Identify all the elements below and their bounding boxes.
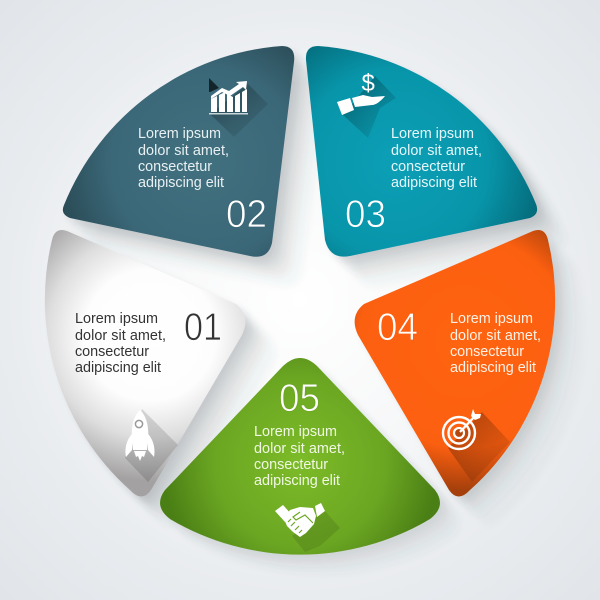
text block 05: consectetur (254, 457, 328, 473)
text block 02: consectetur (138, 159, 212, 175)
icon: hand with dollar: $ (362, 70, 375, 97)
icon: hand with dollar (337, 70, 396, 138)
text block 05: adipiscing elit (254, 473, 340, 489)
text block 03: adipiscing elit (391, 175, 477, 191)
icon: target (443, 409, 510, 482)
number 05: 05 (279, 377, 320, 420)
text block 05: dolor sit amet, (254, 441, 345, 457)
panel: segment 05 (160, 358, 440, 555)
number 04: 04 (377, 306, 418, 349)
icon: rocket (125, 409, 178, 482)
text block 02: Lorem ipsum (138, 126, 221, 142)
text block 01: Lorem ipsum (75, 311, 158, 327)
text block 01: dolor sit amet, (75, 328, 166, 344)
text block 04: Lorem ipsum (450, 311, 533, 327)
text block 02: adipiscing elit (138, 175, 224, 191)
text block 04: consectetur (450, 344, 524, 360)
text block 01: adipiscing elit (75, 360, 161, 376)
number 03: 03 (345, 193, 386, 236)
icon: handshake (275, 503, 340, 552)
text block 02: dolor sit amet, (138, 143, 229, 159)
text block 03: consectetur (391, 159, 465, 175)
panel: segment 03 (306, 46, 537, 257)
icon: bar chart (209, 78, 268, 137)
text block 05: Lorem ipsum (254, 424, 337, 440)
panel: segment 04 (355, 230, 555, 496)
panel: segment 02 (63, 46, 294, 257)
panel: segment 01 (45, 230, 245, 496)
text block 04: dolor sit amet, (450, 328, 541, 344)
text block 03: dolor sit amet, (391, 143, 482, 159)
text block 03: Lorem ipsum (391, 126, 474, 142)
number 02: 02 (226, 193, 267, 236)
text block 01: consectetur (75, 344, 149, 360)
long shadows of segments (50, 51, 585, 575)
text block 04: adipiscing elit (450, 360, 536, 376)
number 01: 01 (184, 306, 222, 349)
